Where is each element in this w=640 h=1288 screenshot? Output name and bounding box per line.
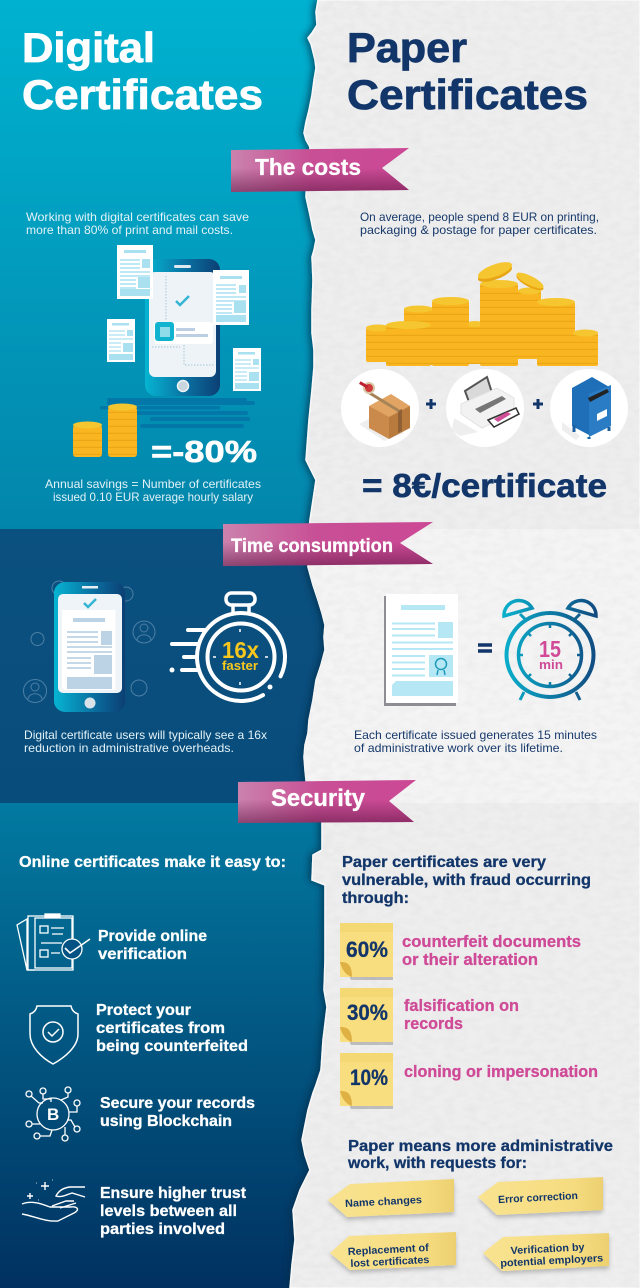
icon: blockchain bitcoin	[26, 1087, 80, 1141]
text: protect certificates	[96, 1002, 248, 1055]
banner: the costs: The costs	[255, 154, 361, 180]
tag: verification by potential employers	[483, 1233, 609, 1271]
sticky note: 60 percent	[340, 923, 393, 980]
icon: shield	[30, 1006, 78, 1064]
title: paper certificates: Certificates	[347, 71, 588, 118]
text: annual savings formula: Annual savings = Number of certificates	[45, 477, 261, 491]
tag: name changes	[328, 1179, 454, 1217]
text: protect certificates: Protect your	[96, 1002, 191, 1019]
tag: replacement of lost certificates: lost certificates	[350, 1254, 430, 1270]
banner: time consumption	[223, 522, 433, 566]
icon: user circles around phone	[24, 581, 155, 702]
text: annual savings formula: issued 0.10 EUR average hourly salary	[53, 490, 253, 504]
icon: clipboard verification	[17, 914, 90, 970]
text: annual savings formula	[45, 477, 261, 504]
text: ensure trust: Ensure higher trust	[100, 1185, 247, 1202]
title: paper certificates: Paper	[347, 24, 467, 71]
icon: blockchain bitcoin: B	[47, 1105, 59, 1124]
icon: document left	[107, 319, 135, 362]
panel: paper background with torn edge	[285, 0, 640, 1288]
icon: document top left	[117, 245, 153, 299]
icon: mailbox in circle	[550, 369, 628, 447]
text: secure blockchain	[100, 1095, 255, 1130]
title: digital certificates: Certificates	[22, 71, 263, 118]
icon: alarm clock 15 min: min	[539, 658, 563, 672]
title: digital certificates	[22, 24, 263, 118]
icon: trust hands	[22, 1180, 85, 1221]
heading: paper administrative work	[347, 1138, 613, 1172]
heading: paper administrative work: work, with requests for:	[347, 1155, 527, 1172]
title: paper certificates	[347, 24, 588, 118]
text: counterfeit documents	[402, 933, 581, 969]
tag: error correction	[478, 1177, 603, 1215]
text: ensure trust: parties involved	[100, 1221, 225, 1238]
text: falsification on records: records	[404, 1015, 463, 1033]
tag: error correction: Error correction	[498, 1190, 578, 1206]
text: paper cost intro	[360, 210, 599, 237]
text: digital time reduction: reduction in administrative overheads.	[24, 741, 234, 755]
text: paper time cost: of administrative work over its lifetime.	[354, 741, 563, 755]
banner: the costs	[231, 148, 409, 192]
text: paper cost intro: packaging & postage for paper certificates.	[360, 223, 597, 237]
icon: plus sign	[426, 399, 436, 409]
icon: parcel in circle	[341, 369, 419, 447]
text: digital savings intro: more than 80% of print and mail costs.	[26, 223, 233, 237]
text: paper time cost: Each certificate issued generates 15 minutes	[354, 728, 597, 742]
tag: verification by potential employers: Verification by	[510, 1241, 585, 1257]
text: provide online verification	[98, 928, 207, 963]
text: falsification on records: falsification on	[404, 997, 519, 1015]
tag: name changes: Name changes	[345, 1194, 422, 1210]
heading: paper vulnerable	[342, 854, 591, 907]
icon: plus sign	[533, 399, 543, 409]
sticky note: 30 percent: 30%	[347, 1000, 388, 1025]
icon: equals sign	[478, 645, 492, 651]
icon: stopwatch 16x faster: faster	[222, 659, 258, 673]
illustration: phone with certificate	[54, 582, 125, 712]
sticky note: 30 percent	[340, 988, 393, 1045]
sticky note: 10 percent	[340, 1053, 393, 1109]
text: counterfeit documents: or their alteration	[402, 951, 538, 969]
text: digital time reduction: Digital certificate users will typically see a 16x	[24, 728, 267, 742]
icon: water reflection under phone	[100, 398, 255, 428]
tag: replacement of lost certificates: Replacement of	[347, 1242, 430, 1258]
text: paper cost intro: On average, people spend 8 EUR on printing,	[360, 210, 599, 224]
text: ensure trust: levels between all	[100, 1203, 237, 1220]
text: protect certificates: being counterfeited	[96, 1038, 248, 1055]
tag: verification by potential employers: potential employers	[500, 1252, 604, 1270]
icon: printer in circle	[446, 369, 524, 447]
stat: minus 80 percent: =-80%	[151, 434, 257, 469]
icon: stopwatch 16x faster	[170, 593, 301, 717]
text: falsification on records	[404, 997, 519, 1033]
heading: paper vulnerable: Paper certificates are very	[342, 854, 546, 871]
icon: stopwatch 16x faster: 16x	[222, 637, 259, 663]
tag: replacement of lost certificates	[330, 1232, 456, 1270]
text: paper time cost	[354, 728, 597, 755]
heading: paper vulnerable: vulnerable, with fraud occurring	[342, 872, 591, 889]
heading: paper administrative work: Paper means more administrative	[348, 1138, 613, 1155]
illustration: gold coin stacks	[366, 259, 598, 366]
text: secure blockchain: Secure your records	[100, 1095, 255, 1112]
banner: security	[238, 780, 416, 823]
illustration: paper certificate	[384, 594, 458, 706]
text: secure blockchain: using Blockchain	[100, 1113, 232, 1130]
icon: alarm clock 15 min: 15	[539, 636, 561, 662]
sticky note: 60 percent: 60%	[346, 937, 388, 962]
text: protect certificates: certificates from	[96, 1020, 225, 1037]
heading: online certificates: Online certificates make it easy to:	[19, 854, 286, 871]
text: provide online verification: Provide online	[98, 928, 207, 945]
banner: security: Security	[271, 785, 366, 812]
text: digital savings intro: Working with digital certificates can save	[26, 210, 249, 224]
text: provide online verification: verification	[98, 946, 187, 963]
text: digital savings intro	[26, 210, 249, 237]
icon: document top right	[213, 270, 249, 325]
text: counterfeit documents: counterfeit documents	[402, 933, 581, 951]
title: digital certificates: Digital	[22, 24, 155, 71]
icon: document right	[233, 348, 261, 391]
text: cloning or impersonation: cloning or impersonation	[404, 1063, 598, 1081]
sticky note: 10 percent: 10%	[350, 1065, 388, 1090]
icon: small coin stacks	[73, 404, 137, 457]
text: ensure trust	[100, 1185, 247, 1238]
banner: time consumption: Time consumption	[231, 536, 393, 557]
panel: digital background	[0, 0, 340, 1288]
illustration: phone with documents	[107, 245, 261, 396]
stat: 8 euro per certificate: = 8€/certificate	[362, 467, 607, 504]
heading: paper vulnerable: through:	[342, 890, 409, 907]
text: digital time reduction	[24, 728, 267, 755]
icon: alarm clock 15 min	[504, 600, 596, 700]
